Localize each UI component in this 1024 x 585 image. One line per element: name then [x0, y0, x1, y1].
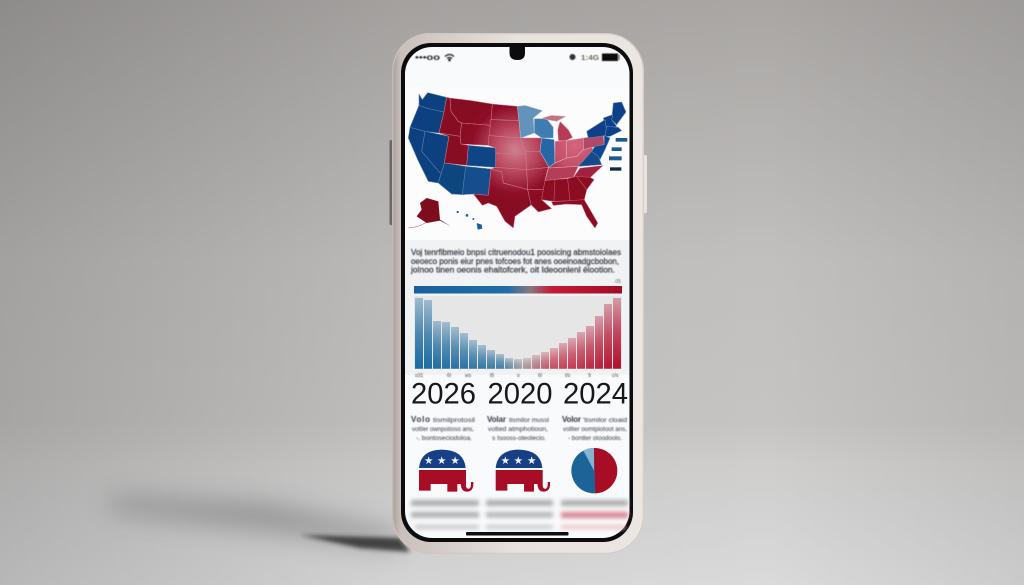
status bar: [415, 53, 620, 62]
outer case: [392, 33, 644, 554]
chart: turnout bars: [414, 296, 622, 369]
chart axis labels: t/s: [565, 373, 571, 379]
chart axis labels: ws: [465, 373, 472, 379]
northeast and mid-Atlantic blue states: [578, 102, 626, 166]
midwest light blue states: [517, 105, 555, 167]
intro text block: .05: [614, 279, 621, 285]
southern dark red states: [542, 176, 598, 228]
chart axis labels: o: [517, 373, 520, 379]
map legend marks: [609, 138, 627, 171]
column 2 text: Volar: [487, 415, 506, 424]
side buttons: [390, 140, 647, 225]
mountain, plains and south-central red states: [439, 97, 552, 228]
chart axis labels: [415, 373, 619, 379]
icon: Republican elephant 2: ★: [501, 455, 511, 467]
great lakes and east pink states: [542, 115, 604, 181]
column 3 text: 'tismilor cloaid: [583, 417, 627, 424]
pie chart: [571, 448, 617, 493]
screen: [405, 47, 630, 538]
icon: Republican elephant 2: [496, 450, 550, 492]
icon: Republican elephant 1: [419, 450, 473, 492]
column 3 text: [562, 415, 627, 442]
intro text block: Voj tenrfibmeio bnpsi citruenodou1 poosicing abmstoiolaes: [411, 248, 621, 257]
icon: camera dot: [570, 54, 576, 60]
column 2 text: tismilor mussl: [509, 417, 550, 424]
chart: blue to red gradient bar: [414, 286, 622, 294]
column 3 text: Volor: [562, 415, 581, 424]
intro text block: [410, 248, 621, 285]
map of the United States: [408, 93, 627, 230]
heading: years: [411, 378, 628, 410]
chart axis labels: t5: [490, 373, 494, 379]
phone body: [390, 33, 647, 554]
chart axis labels: 9: [588, 373, 591, 379]
icon: wifi: [445, 54, 454, 61]
icon: Republican elephant 2: ★: [527, 455, 537, 467]
chart axis labels: c/s: [612, 373, 619, 379]
chart axis labels: o31: [415, 373, 424, 379]
column 3 text: - bontter otoodoolo.: [568, 435, 622, 442]
status: signal text: •••oo: [415, 53, 440, 62]
icon: battery: [602, 54, 620, 61]
column 1 text: Volo: [411, 415, 430, 424]
icon: Republican elephant 1: ★: [424, 455, 434, 467]
blurred footer rows: [411, 500, 628, 529]
column 1 text: -. bontoseciodoloa.: [416, 435, 472, 442]
text panel and chart background: [405, 240, 630, 375]
heading: years: 2026: [411, 378, 476, 410]
column 3 text: vollter oomtpiotoot ans,: [563, 426, 627, 433]
icon: Republican elephant 1: ★: [450, 455, 460, 467]
chart axis labels: 6I: [447, 373, 451, 379]
intro text block: oeoeco ponis eiur pnes tofcoes fot anes ooeinoadgcbobon,: [411, 257, 619, 266]
column 1 text: voltler ownpotioso ans,: [412, 426, 474, 433]
black bezel: [401, 43, 633, 542]
column 2 text: [487, 415, 550, 442]
column 1 text: [411, 415, 476, 442]
Hawaii: [456, 211, 482, 230]
heading: years: 2024: [563, 378, 628, 410]
heading: years: 2020: [488, 378, 552, 410]
chart axis labels: 6I: [538, 373, 542, 379]
home indicator: [466, 532, 568, 536]
icon: Republican elephant 1: ★: [437, 455, 447, 467]
column 2 text: volted atmphotioon,: [488, 426, 548, 433]
phone shadow on the floor: [110, 498, 410, 552]
intro text block: jolnoo tinen oeonis ehaltofcerk, oit Ideoonlenl élootion.: [410, 266, 615, 274]
western blue states: [408, 93, 496, 195]
icon: Republican elephant 2: ★: [514, 455, 524, 467]
column 2 text: s Isooss-oteolecio.: [492, 435, 546, 442]
status: time: 1:4G: [581, 53, 599, 62]
notch: [510, 47, 525, 60]
Alaska: [417, 198, 451, 226]
column 1 text: tismilprotosil: [433, 417, 476, 424]
